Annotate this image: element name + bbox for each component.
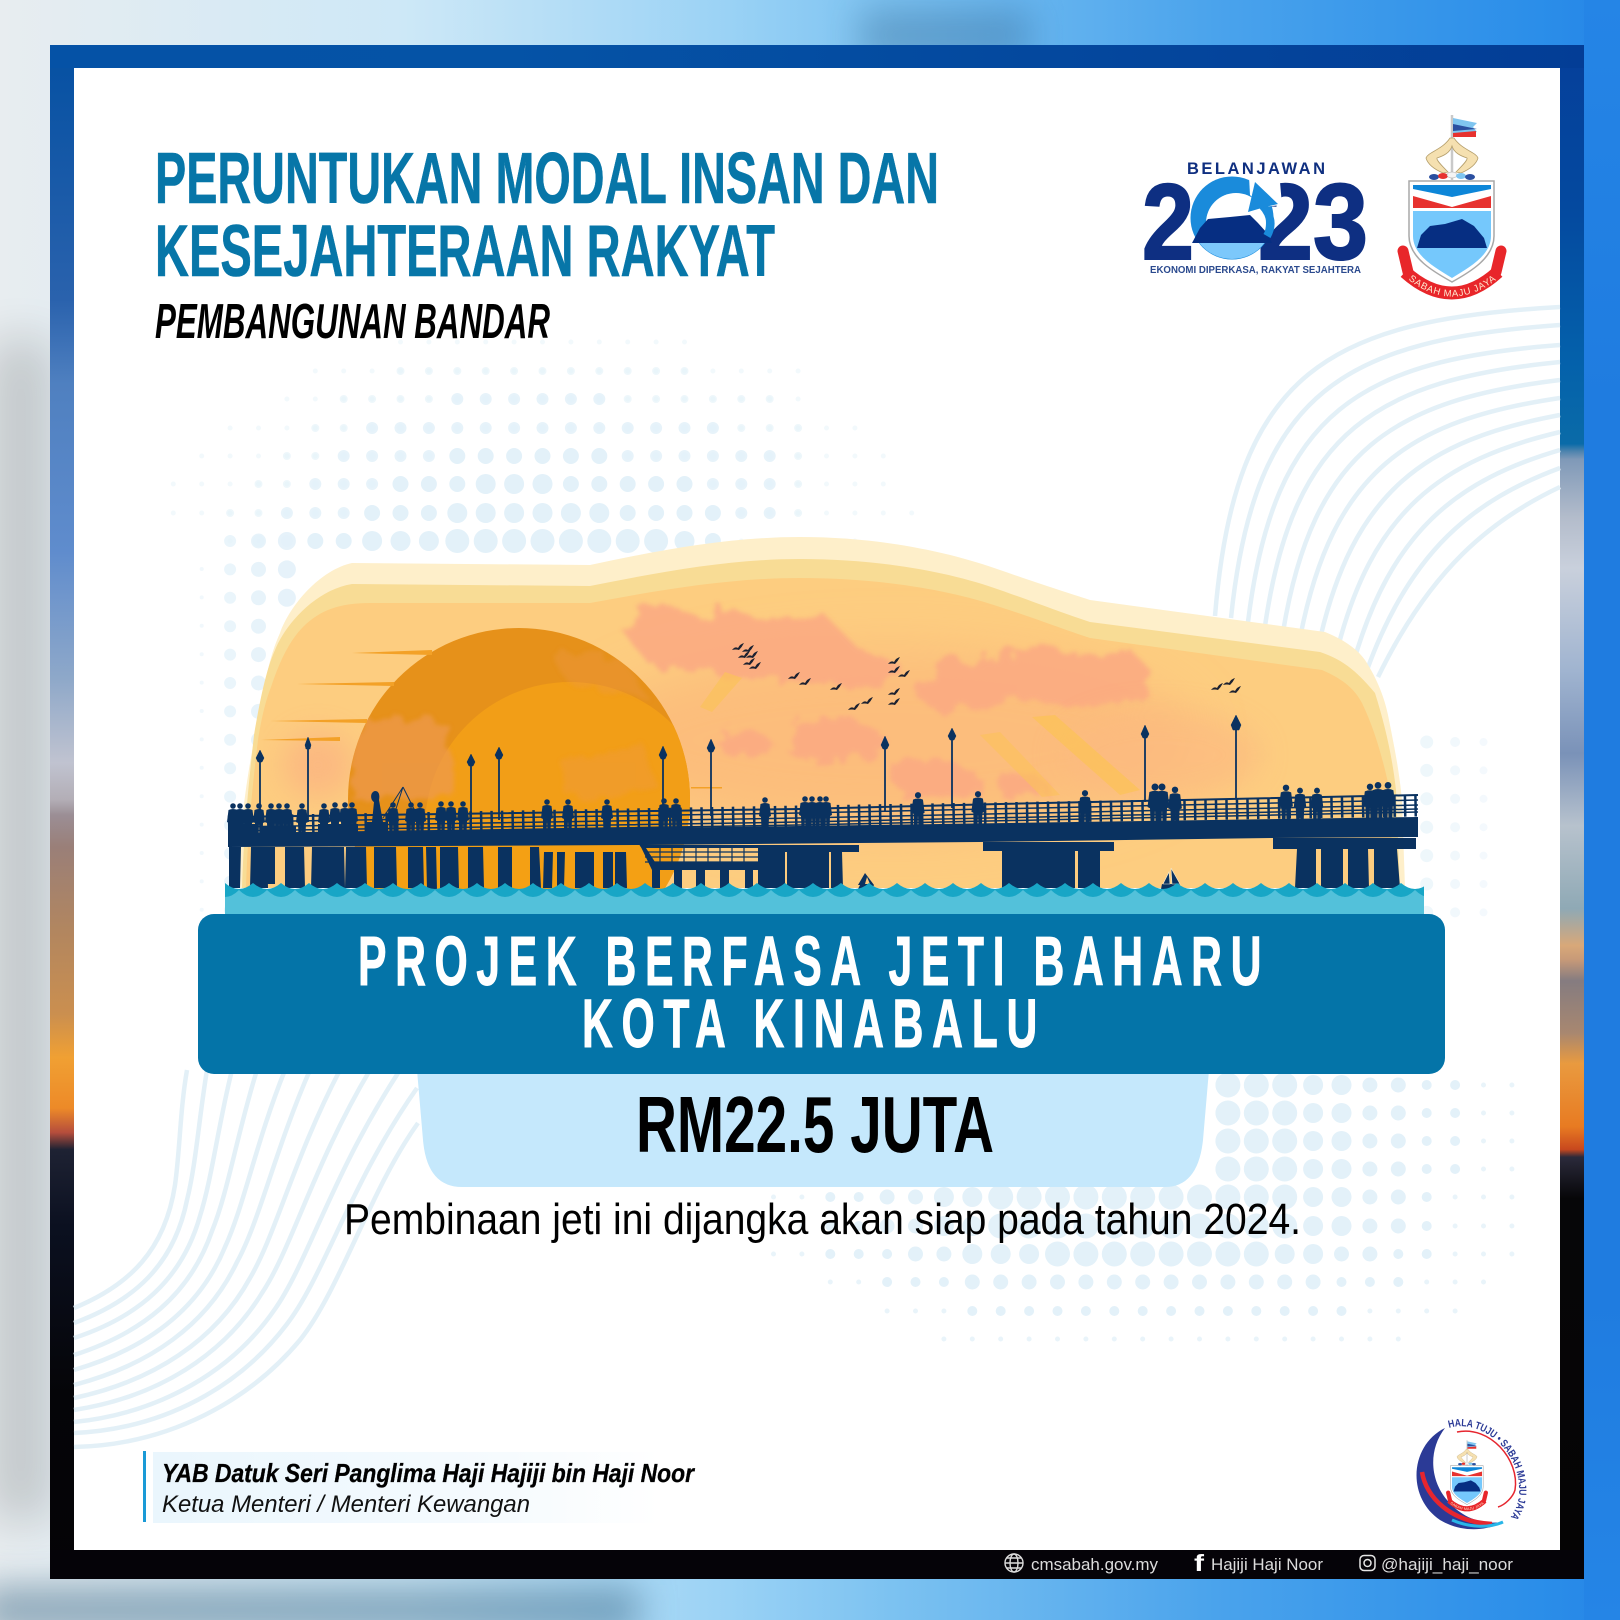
subtitle: PEMBANGUNAN BANDAR xyxy=(155,295,550,349)
logo: Belanjawan 2023: BELANJAWAN xyxy=(1187,160,1325,178)
credit block: Ketua Menteri / Menteri Kewangan xyxy=(162,1491,530,1518)
amount: RM22.5 JUTA xyxy=(636,1080,994,1169)
footer: social links: Hajiji Haji Noor xyxy=(1211,1555,1323,1574)
middle band xyxy=(242,559,1400,888)
icon: instagram xyxy=(1360,1556,1375,1570)
logo: Hala Tuju Sabah Maju Jaya xyxy=(1416,1419,1526,1530)
inner sun glow xyxy=(349,649,690,889)
logo: Belanjawan 2023: EKONOMI DIPERKASA, RAKYAT SEJAHTERA xyxy=(1150,264,1361,276)
platform railing xyxy=(640,845,760,870)
logo: Belanjawan 2023 xyxy=(1142,160,1368,282)
people on jetty xyxy=(227,782,1395,835)
illustration: sunset jetty xyxy=(225,537,1424,914)
amount panel xyxy=(417,1070,1209,1187)
sun streaks xyxy=(261,650,722,788)
banner: project name: KOTA KINABALU xyxy=(582,985,1046,1062)
footer: social links xyxy=(1005,1550,1513,1576)
logo: Hala Tuju Sabah Maju Jaya: HALA TUJU • SABAH MAJU JAYA xyxy=(1448,1419,1526,1519)
under-deck sun glow xyxy=(366,845,650,890)
jetty deck and piles xyxy=(228,817,1418,890)
wave lines top right xyxy=(1215,307,1560,677)
sky xyxy=(246,578,1394,888)
footer: social links: @hajiji_haji_noor xyxy=(1381,1555,1513,1574)
title: KESEJAHTERAAN RAKYAT xyxy=(155,211,775,292)
halftone dots lower right xyxy=(774,742,1513,1339)
boats xyxy=(858,868,1180,889)
title xyxy=(155,138,939,292)
lamp posts xyxy=(256,715,1241,822)
water xyxy=(225,880,1424,916)
outer glow shape xyxy=(238,537,1405,888)
credit block xyxy=(143,1451,696,1523)
halftone dots top left xyxy=(173,342,912,912)
jetty railing xyxy=(228,795,1418,834)
icon: globe xyxy=(1005,1554,1023,1572)
credit block: YAB Datuk Seri Panglima Haji Hajiji bin Haji Noor xyxy=(162,1458,696,1488)
logo: Sabah crest xyxy=(1398,115,1506,300)
description: Pembinaan jeti ini dijangka akan siap pada tahun 2024. xyxy=(344,1196,1301,1244)
wave lines lower left xyxy=(74,1070,418,1447)
banner: project name xyxy=(198,914,1445,1074)
lower platform xyxy=(640,845,760,870)
logo: Sabah crest: SABAH MAJU JAYA xyxy=(1409,275,1496,297)
icon: facebook: f xyxy=(1194,1550,1204,1576)
logo: Belanjawan 2023: 2 xyxy=(1142,161,1194,282)
title: PERUNTUKAN MODAL INSAN DAN xyxy=(155,138,939,219)
sun xyxy=(348,628,690,970)
logo: Belanjawan 2023: 23 xyxy=(1258,161,1368,282)
birds xyxy=(732,643,1241,710)
sky clouds xyxy=(284,605,1260,830)
footer: social links: cmsabah.gov.my xyxy=(1031,1555,1158,1574)
